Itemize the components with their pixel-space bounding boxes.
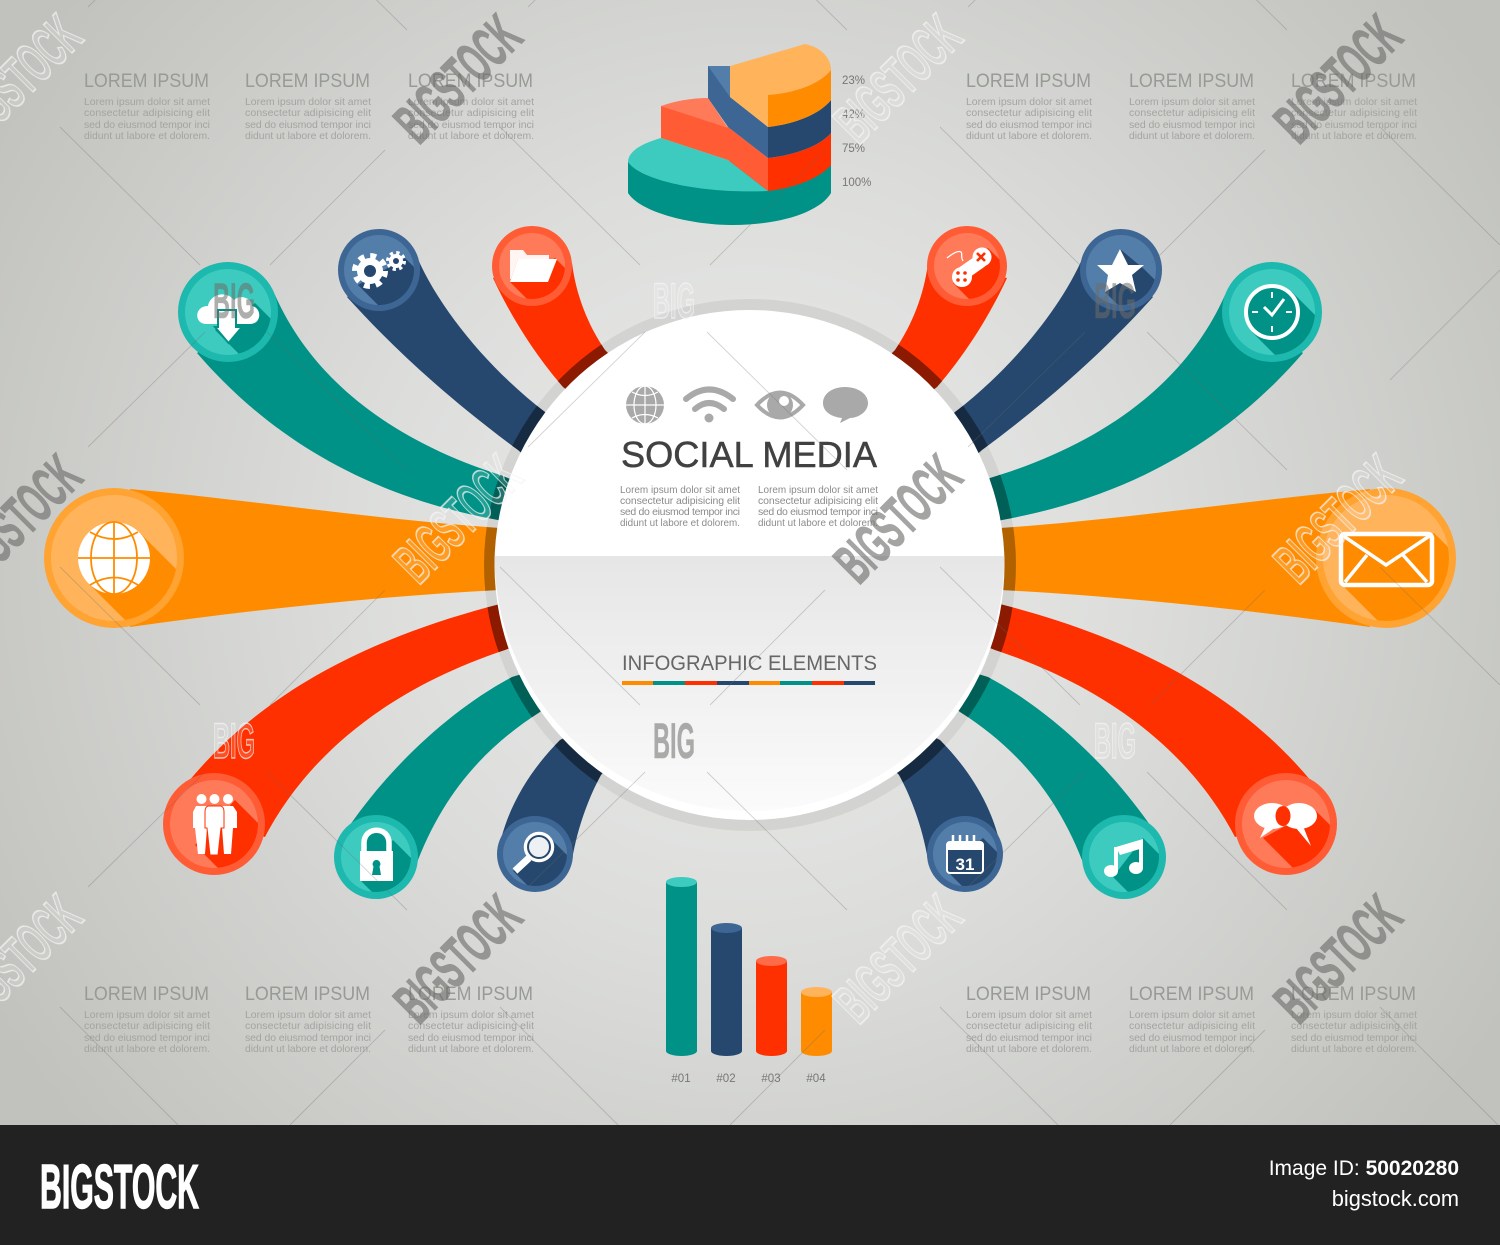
text blocks: top row: LOREM IPSUM — [966, 71, 1091, 92]
medallion: gears — [338, 229, 420, 311]
title: social media: SOCIAL MEDIA — [621, 434, 877, 475]
medallion: calendar: 31 — [956, 855, 974, 874]
pie chart — [628, 44, 871, 225]
text blocks: bottom row: Lorem ipsum dolor sit amet — [408, 1009, 534, 1021]
text blocks: top row: LOREM IPSUM — [245, 71, 370, 92]
text blocks: top row: Lorem ipsum dolor sit amet — [408, 96, 534, 108]
text blocks: top row: didunt ut labore et dolorem. — [408, 130, 534, 142]
medallion: cloud download — [178, 262, 278, 362]
text blocks: top row: didunt ut labore et dolorem. — [1129, 130, 1255, 142]
medallion: calendar — [927, 816, 1003, 892]
text blocks: top row: LOREM IPSUM — [84, 71, 209, 92]
medallion: music note — [1082, 815, 1166, 899]
medallion: padlock — [334, 815, 418, 899]
text blocks: top row: Lorem ipsum dolor sit amet — [1291, 96, 1417, 108]
pie labels: 42% — [842, 109, 865, 121]
ribbon: red top left — [493, 263, 608, 389]
text blocks: top row: didunt ut labore et dolorem. — [245, 130, 371, 142]
text blocks: top row: LOREM IPSUM — [1129, 71, 1254, 92]
footer bar: BIGSTOCK — [40, 1153, 199, 1222]
text blocks: top row: sed do eiusmod tempor inci — [1129, 119, 1255, 131]
medallion: game controller — [927, 226, 1007, 306]
text blocks: top row: didunt ut labore et dolorem. — [1291, 130, 1417, 142]
ribbon: teal top left — [197, 295, 530, 525]
text blocks: bottom row: consectetur adipisicing elit — [1129, 1020, 1255, 1032]
watermark: BIG: BIG — [213, 713, 255, 769]
medallion: envelope — [1316, 488, 1456, 628]
text blocks: top row: Lorem ipsum dolor sit amet — [84, 96, 210, 108]
bar labels: #02 — [716, 1073, 736, 1085]
center text block: Lorem ipsum dolor sit amet — [758, 484, 878, 496]
text blocks: bottom row: sed do eiusmod tempor inci — [408, 1032, 534, 1044]
text blocks: bottom row: LOREM IPSUM — [1129, 984, 1254, 1005]
text blocks: bottom row: sed do eiusmod tempor inci — [1129, 1032, 1255, 1044]
medallion: folder — [492, 226, 572, 306]
text blocks: bottom row: consectetur adipisicing elit — [84, 1020, 210, 1032]
watermark: BIGSTOCK: BIGSTOCK — [382, 883, 534, 1035]
text blocks: bottom row: Lorem ipsum dolor sit amet — [1129, 1009, 1255, 1021]
text blocks: top row: didunt ut labore et dolorem. — [84, 130, 210, 142]
text blocks: bottom row: didunt ut labore et dolorem. — [966, 1043, 1092, 1055]
text blocks: top row: sed do eiusmod tempor inci — [245, 119, 371, 131]
text blocks: bottom row: didunt ut labore et dolorem. — [245, 1043, 371, 1055]
pie labels — [842, 75, 871, 189]
subtitle: infographic elements: INFOGRAPHIC ELEMENTS — [622, 652, 877, 675]
ribbon: navy bottom left — [502, 738, 603, 856]
text blocks: bottom row: didunt ut labore et dolorem. — [408, 1043, 534, 1055]
footer bar — [0, 1125, 1500, 1245]
center text block: consectetur adipisicing elit — [758, 495, 878, 507]
text blocks: bottom row: LOREM IPSUM — [245, 984, 370, 1005]
text: BIG — [1094, 713, 1136, 769]
text blocks: bottom row: sed do eiusmod tempor inci — [966, 1032, 1092, 1044]
medallion: globe — [44, 488, 184, 628]
medallion: clock — [1222, 262, 1322, 362]
bar chart — [666, 877, 832, 1085]
image id: Image ID: 50020280 — [1269, 1157, 1459, 1180]
pie labels: 23% — [842, 75, 865, 87]
pie labels: 100% — [842, 177, 871, 189]
text blocks: top row: consectetur adipisicing elit — [966, 107, 1092, 119]
center text block: sed do eiusmod tempor inci — [758, 506, 878, 518]
text blocks: top row: sed do eiusmod tempor inci — [408, 119, 534, 131]
text blocks: top row — [84, 71, 1417, 142]
watermark: BIG: BIG — [653, 713, 695, 769]
center text block: didunt ut labore et dolorem. — [620, 517, 740, 529]
watermark: BIGSTOCK — [0, 3, 1414, 1035]
text blocks: bottom row: Lorem ipsum dolor sit amet — [966, 1009, 1092, 1021]
medallion: speech bubbles — [1235, 773, 1337, 875]
text blocks: bottom row: consectetur adipisicing elit — [966, 1020, 1092, 1032]
text blocks: top row: consectetur adipisicing elit — [1129, 107, 1255, 119]
text blocks: bottom row: consectetur adipisicing elit — [408, 1020, 534, 1032]
center text block — [620, 484, 878, 529]
text blocks: bottom row: Lorem ipsum dolor sit amet — [245, 1009, 371, 1021]
text blocks: bottom row — [84, 984, 1417, 1055]
text blocks: bottom row: didunt ut labore et dolorem. — [84, 1043, 210, 1055]
text blocks: top row: consectetur adipisicing elit — [1291, 107, 1417, 119]
ribbon: teal bottom left — [351, 674, 541, 861]
text blocks: bottom row: sed do eiusmod tempor inci — [1291, 1032, 1417, 1044]
text blocks: top row: LOREM IPSUM — [408, 71, 533, 92]
medallion: people — [163, 773, 265, 875]
text blocks: bottom row: LOREM IPSUM — [408, 984, 533, 1005]
watermark: BIGSTOCK: BIGSTOCK — [822, 443, 974, 595]
bar labels: #03 — [761, 1073, 781, 1085]
text blocks: bottom row: LOREM IPSUM — [1291, 984, 1416, 1005]
text blocks: top row: consectetur adipisicing elit — [245, 107, 371, 119]
text blocks: top row: sed do eiusmod tempor inci — [84, 119, 210, 131]
center text block: didunt ut labore et dolorem. — [758, 517, 878, 529]
medallion: magnifier — [497, 816, 573, 892]
ribbon: orange left — [130, 489, 500, 627]
center text block: Lorem ipsum dolor sit amet — [620, 484, 740, 496]
bar labels — [671, 1073, 826, 1085]
text: BIG — [1094, 273, 1136, 329]
text blocks: bottom row: consectetur adipisicing elit — [245, 1020, 371, 1032]
watermark: BIGSTOCK: BIGSTOCK — [822, 883, 974, 1035]
ribbon: red bottom left — [190, 604, 509, 837]
text blocks: bottom row: LOREM IPSUM — [84, 984, 209, 1005]
text blocks: top row: LOREM IPSUM — [1291, 71, 1416, 92]
watermark: BIG: BIG — [213, 273, 255, 329]
bar labels: #04 — [806, 1073, 826, 1085]
text blocks: top row: Lorem ipsum dolor sit amet — [966, 96, 1092, 108]
watermark: BIGSTOCK: BIGSTOCK — [382, 443, 534, 595]
center text block: sed do eiusmod tempor inci — [620, 506, 740, 518]
icon row: globe, wifi, eye, speech bubble — [626, 386, 868, 424]
center text block: consectetur adipisicing elit — [620, 495, 740, 507]
text blocks: bottom row: didunt ut labore et dolorem. — [1129, 1043, 1255, 1055]
text blocks: top row: consectetur adipisicing elit — [408, 107, 534, 119]
text blocks: top row: sed do eiusmod tempor inci — [1291, 119, 1417, 131]
text blocks: top row: sed do eiusmod tempor inci — [966, 119, 1092, 131]
text blocks: bottom row: Lorem ipsum dolor sit amet — [1291, 1009, 1417, 1021]
watermark: BIG — [213, 273, 1136, 769]
ribbon: navy top left — [347, 260, 546, 452]
circle ring — [484, 299, 1016, 831]
text blocks: top row: consectetur adipisicing elit — [84, 107, 210, 119]
text blocks: bottom row: Lorem ipsum dolor sit amet — [84, 1009, 210, 1021]
ribbons: mirrored right side — [880, 257, 1370, 868]
text blocks: bottom row: sed do eiusmod tempor inci — [84, 1032, 210, 1044]
text blocks: top row: Lorem ipsum dolor sit amet — [245, 96, 371, 108]
bar labels: #01 — [671, 1073, 691, 1085]
text blocks: bottom row: consectetur adipisicing elit — [1291, 1020, 1417, 1032]
colour stripe — [622, 681, 875, 685]
text blocks: top row: didunt ut labore et dolorem. — [966, 130, 1092, 142]
site url: bigstock.com — [1332, 1186, 1459, 1211]
watermark: BIG: BIG — [653, 273, 695, 329]
pie labels: 75% — [842, 143, 865, 155]
text blocks: top row: Lorem ipsum dolor sit amet — [1129, 96, 1255, 108]
text blocks: bottom row: didunt ut labore et dolorem. — [1291, 1043, 1417, 1055]
center circle — [494, 310, 1004, 820]
text blocks: bottom row: sed do eiusmod tempor inci — [245, 1032, 371, 1044]
medallion: star — [1080, 229, 1162, 311]
text blocks: bottom row: LOREM IPSUM — [966, 984, 1091, 1005]
